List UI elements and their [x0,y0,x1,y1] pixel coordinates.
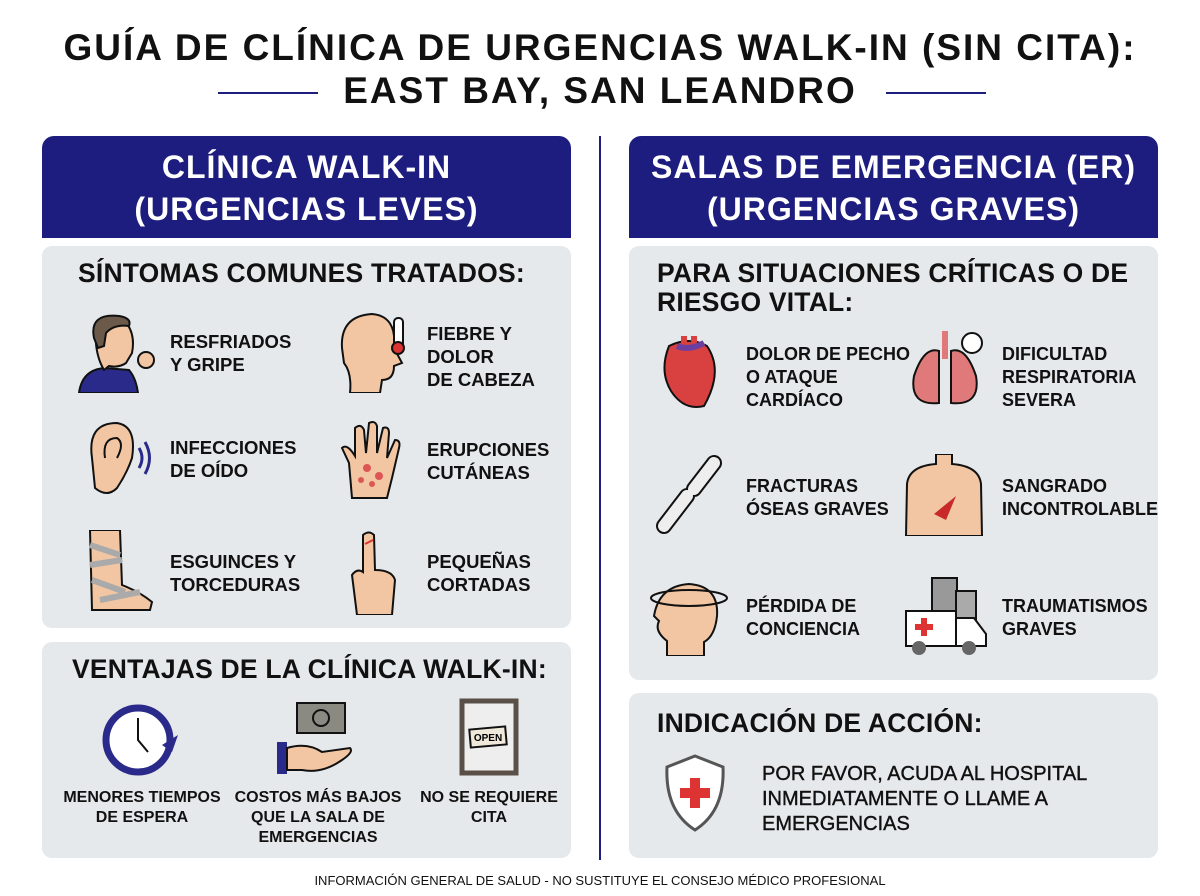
panel: ventajas [42,642,571,858]
text: sangrado: INCONTROLABLE [1002,499,1158,519]
icon: shield [665,754,725,832]
text: oido [170,437,296,481]
text: resfriados [170,331,291,375]
text: oido: DE OÍDO [170,460,248,481]
icon: ambulance [905,577,987,655]
text: resfriados: Y GRIPE [170,354,245,375]
text: traumatismos: GRAVES [1002,619,1077,639]
text: fracturas: FRACTURAS [746,476,858,496]
icon: bleeding [905,454,983,536]
text: pecho: O ATAQUE [746,367,838,387]
text: erupciones: CUTÁNEAS [427,462,530,483]
panel: symptoms [42,246,571,628]
icon: cut [351,532,396,615]
label: tiempos [63,789,221,826]
text: respiratoria: SEVERA [1002,390,1076,410]
title: EAST BAY, SAN LEANDRO [343,70,857,111]
icon: open door: OPEN [474,733,502,744]
label: costos: QUE LA SALA DE [251,809,385,826]
label: costos: COSTOS MÁS BAJOS [235,789,401,806]
title: GUÍA DE CLÍNICA DE URGENCIAS WALK-IN (SIN CITA): [63,27,1137,68]
text: action: EMERGENCIAS [762,813,910,835]
icon: ear [90,422,151,494]
panel: critical [629,246,1158,680]
icon: open door [460,698,518,776]
text: cortadas: CORTADAS [427,574,530,595]
icon: money hand [277,702,352,774]
text: erupciones [427,439,549,483]
header: salas de emergencia: SALAS DE EMERGENCIA (ER) [651,149,1136,185]
text: fiebre: DE CABEZA [427,369,535,390]
heading: critical: PARA SITUACIONES CRÍTICAS O DE [657,258,1128,288]
icon: rash [340,421,400,499]
header: clinica walk-in: CLÍNICA WALK-IN [162,149,451,185]
heading: critical [657,258,1128,317]
heading: critical: RIESGO VITAL: [657,287,853,317]
text: cortadas [427,551,531,595]
header: clinica walk-in: (URGENCIAS LEVES) [134,191,479,227]
text: esguinces [170,551,300,595]
header: salas de emergencia: (URGENCIAS GRAVES) [707,191,1080,227]
icon: lungs [912,331,983,404]
heading: symptoms: SÍNTOMAS COMUNES TRATADOS: [78,258,525,288]
icon: clock [102,704,178,776]
text: conciencia: PÉRDIDA DE [746,596,856,616]
title [63,27,1137,111]
text: action: INMEDIATAMENTE O LLAME A [762,788,1048,810]
text: fiebre [427,323,535,390]
text: pecho: CARDÍACO [746,390,843,410]
text: traumatismos: TRAUMATISMOS [1002,596,1148,616]
text: respiratoria: DIFICULTAD [1002,344,1107,364]
label: cita [420,789,558,826]
label: cita: CITA [471,809,507,826]
text: esguinces: TORCEDURAS [170,574,300,595]
header: clinica walk-in [42,136,571,238]
text: sangrado [1002,476,1158,519]
label: tiempos: MENORES TIEMPOS [63,789,221,806]
icon: fever [340,313,405,393]
text: respiratoria: RESPIRATORIA [1002,367,1136,387]
text: action [762,763,1087,835]
text: erupciones: ERUPCIONES [427,439,549,460]
header: salas de emergencia [629,136,1158,238]
label: costos [235,788,401,846]
text: resfriados: RESFRIADOS [170,331,291,352]
text: pecho [746,344,910,410]
text: fiebre: FIEBRE Y [427,323,512,344]
text: respiratoria [1002,344,1136,410]
text: pecho: DOLOR DE PECHO [746,344,910,364]
text: traumatismos [1002,596,1148,639]
text: fiebre: DOLOR [427,346,494,367]
text: fracturas: ÓSEAS GRAVES [746,499,889,519]
heading: ventajas: VENTAJAS DE LA CLÍNICA WALK-IN: [72,654,547,684]
label: costos: EMERGENCIAS [258,829,378,846]
footer: INFORMACIÓN GENERAL DE SALUD - NO SUSTITUYE EL CONSEJO MÉDICO PROFESIONAL [314,873,886,888]
icon: bone [656,455,722,534]
text: esguinces: ESGUINCES Y [170,551,296,572]
text: action: POR FAVOR, ACUDA AL HOSPITAL [762,763,1087,785]
icon: sprain [89,530,154,611]
label: tiempos: DE ESPERA [96,809,188,826]
text: conciencia: CONCIENCIA [746,619,860,639]
text: conciencia [746,596,860,639]
text: cortadas: PEQUEÑAS [427,551,531,572]
text: fracturas [746,476,889,519]
icon: unconscious [650,583,728,656]
panel: action [629,693,1158,858]
text: oido: INFECCIONES [170,437,296,458]
icon: heart [663,336,716,408]
icon: cough [78,314,155,393]
label: cita: NO SE REQUIERE [420,789,558,806]
heading: action: INDICACIÓN DE ACCIÓN: [657,708,983,738]
text: sangrado: SANGRADO [1002,476,1107,496]
